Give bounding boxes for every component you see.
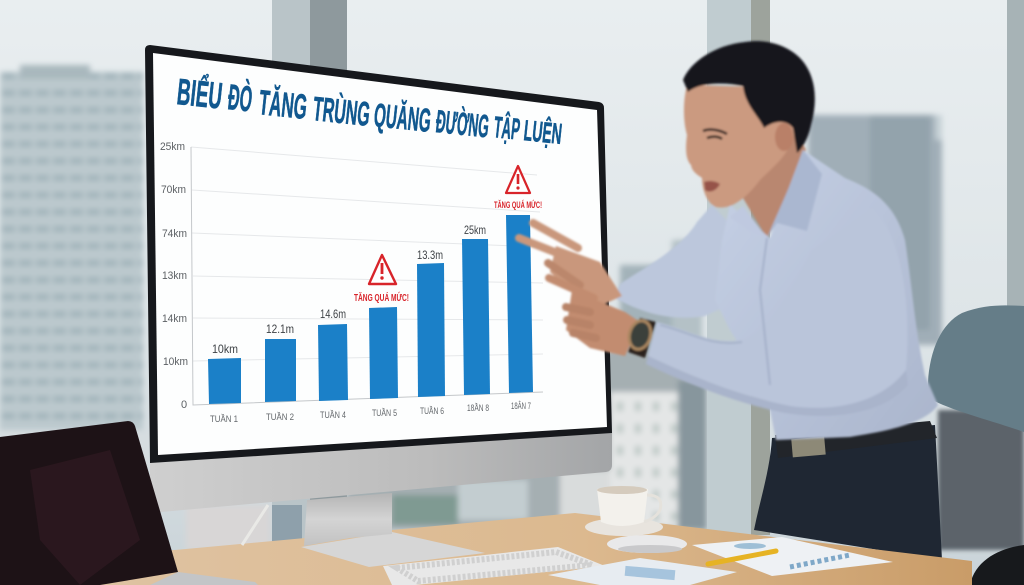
chart title bbox=[175, 70, 564, 151]
x axis labels: 18ÂN 7 bbox=[511, 401, 531, 412]
power cable bbox=[242, 505, 268, 545]
value labels bbox=[212, 223, 486, 356]
shirt placket bbox=[760, 238, 770, 385]
hair bbox=[683, 41, 815, 153]
y axis labels: 25km bbox=[160, 141, 185, 153]
monitor chin bbox=[150, 432, 612, 513]
front arm sleeve bbox=[648, 208, 908, 408]
man pointing at the chart bbox=[519, 41, 938, 440]
y axis labels: 10km bbox=[163, 356, 188, 368]
y axis labels: 13km bbox=[162, 270, 187, 282]
screen bbox=[153, 53, 607, 455]
monitor bbox=[145, 45, 612, 513]
lower hand bbox=[549, 278, 640, 356]
coffee cup and saucer bbox=[585, 486, 663, 536]
chart title: TRÙNG bbox=[311, 90, 372, 134]
desk bbox=[0, 513, 972, 585]
x axis labels: TUẦN 2 bbox=[266, 412, 294, 423]
window pillars bbox=[272, 0, 310, 545]
yellow pen bbox=[708, 551, 776, 564]
chart title: BIỂU bbox=[175, 70, 224, 117]
value labels: 14.6m bbox=[320, 307, 346, 321]
bar chart bbox=[160, 141, 543, 425]
x axis labels: TUẦN 1 bbox=[210, 414, 238, 425]
chart title: TĂNG bbox=[257, 83, 309, 127]
x axis labels: TUẦN 4 bbox=[320, 410, 346, 421]
eye and brow bbox=[703, 130, 727, 134]
chart title: QUĂNG bbox=[372, 96, 433, 139]
chair bbox=[928, 305, 1024, 585]
value labels: 10km bbox=[212, 342, 238, 356]
grid lines bbox=[191, 147, 543, 361]
laptop bbox=[0, 421, 258, 585]
pointing hand bbox=[519, 223, 622, 306]
trousers and belt bbox=[754, 421, 942, 560]
face bbox=[684, 85, 795, 208]
wristwatch bbox=[624, 316, 656, 358]
y axis labels: 70km bbox=[161, 184, 186, 196]
computer mouse bbox=[607, 535, 687, 553]
warning: week 7 bbox=[494, 166, 542, 210]
y axis labels: 74km bbox=[162, 228, 187, 240]
chart title: LUỆN bbox=[522, 113, 564, 151]
y axis labels: 14km bbox=[162, 313, 187, 325]
x axis labels: TUẦN 5 bbox=[372, 408, 397, 419]
x axis labels bbox=[210, 401, 531, 425]
shirt collar bbox=[767, 150, 822, 238]
y axis labels: 0 bbox=[181, 399, 187, 411]
warning: week 5: TĂNG QUÁ MỨC! bbox=[354, 291, 409, 304]
x axis labels: 18ẦN 8 bbox=[467, 403, 489, 414]
y axis labels bbox=[160, 141, 188, 411]
warning: week 7: TĂNG QUÁ MỨC! bbox=[494, 199, 542, 210]
value labels: 13.3m bbox=[417, 248, 443, 262]
neck bbox=[743, 118, 806, 238]
chart title: ĐƯỜNG bbox=[434, 103, 491, 145]
mouth bbox=[704, 181, 720, 192]
value labels: 12.1m bbox=[266, 322, 294, 336]
warning: week 5 bbox=[354, 255, 409, 304]
torso bbox=[715, 150, 938, 440]
ear bbox=[775, 123, 793, 151]
chart title: ĐÒ bbox=[226, 75, 254, 119]
chart title: TẬP bbox=[492, 110, 522, 147]
monitor bezel bbox=[145, 45, 612, 463]
monitor stand bbox=[301, 493, 485, 567]
paper documents bbox=[548, 537, 893, 585]
x axis labels: TUẦN 6 bbox=[420, 406, 444, 417]
value labels: 25km bbox=[464, 223, 486, 237]
back arm sleeve bbox=[615, 205, 745, 318]
bars bbox=[208, 215, 533, 404]
keyboard bbox=[383, 547, 605, 585]
